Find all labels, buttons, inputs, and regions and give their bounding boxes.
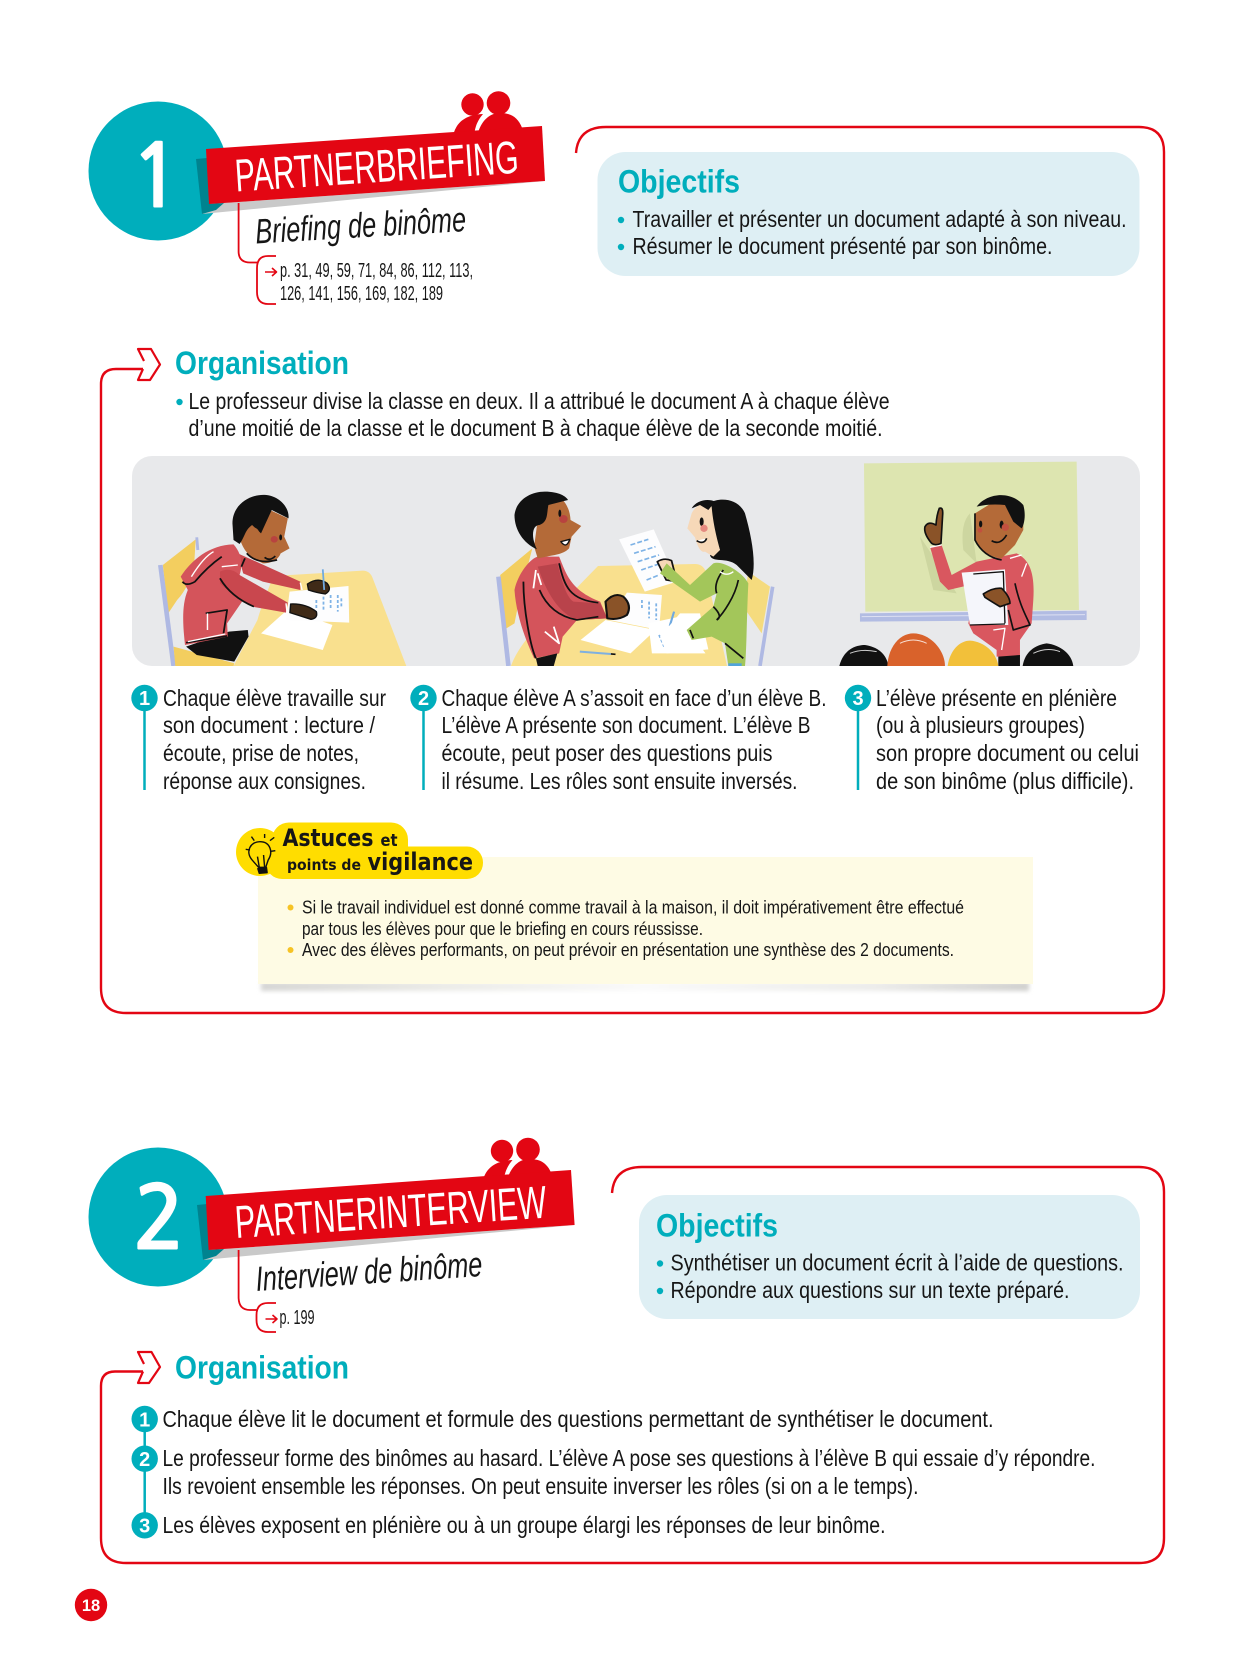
step 3	[845, 685, 1139, 794]
icon: two people	[452, 91, 524, 140]
step 1: écoute, prise de notes,	[163, 740, 359, 766]
panel: objectifs 2: Objectifs	[656, 1208, 778, 1244]
page references	[265, 260, 473, 305]
section 1: partnerbriefing	[88, 91, 1164, 1013]
icon: light bulb	[246, 834, 275, 873]
panel: astuces note: par tous les élèves pour que le briefing en cours réussisse.	[302, 918, 703, 939]
text: organisation intro	[176, 388, 890, 441]
panel: astuces note	[258, 857, 1033, 991]
icon: two people	[482, 1138, 554, 1186]
page reference: p. 199	[280, 1307, 314, 1329]
arrow: organisation chevron	[138, 1352, 160, 1383]
panel: classroom illustrations	[132, 456, 1140, 666]
heading: organisation: Organisation	[175, 1350, 349, 1386]
banner: Partnerbriefing	[196, 126, 545, 214]
page reference	[266, 1307, 314, 1329]
panel: objectifs 2	[639, 1195, 1140, 1319]
step 3: (ou à plusieurs groupes)	[876, 712, 1085, 738]
numbered steps: Chaque élève lit le document et formule des questions permettant de synthétiser le document.	[162, 1406, 994, 1432]
numbered steps: 2	[139, 1449, 150, 1471]
page number badge: 18	[82, 1597, 100, 1615]
numbered steps: Ils revoient ensemble les réponses. On peut ensuite inverser les rôles (si on a le temps).	[162, 1473, 918, 1499]
panel: objectifs 2: Répondre aux questions sur un texte préparé.	[670, 1277, 1070, 1303]
text: organisation intro: d’une moitié de la classe et le document B à chaque élève de la seconde moitié.	[188, 415, 882, 441]
step 2: écoute, peut poser des questions puis	[442, 740, 772, 766]
step 3: de son binôme (plus difficile).	[876, 768, 1134, 794]
banner: Partnerbriefing: PARTNERBRIEFING	[233, 131, 520, 201]
label: astuces et points de vigilance: points de	[287, 856, 361, 874]
label: astuces et points de vigilance: vigilance	[368, 848, 473, 876]
numbered steps: Les élèves exposent en plénière ou à un groupe élargi les réponses de leur binôme.	[162, 1512, 886, 1538]
panel: objectifs 1: Objectifs	[618, 164, 740, 200]
label: astuces et points de vigilance: Astuces	[282, 824, 374, 852]
number badge 2: 2	[132, 1176, 186, 1263]
heading: organisation: Organisation	[175, 345, 349, 381]
banner: Partnerinterview	[197, 1170, 575, 1260]
numbered steps	[132, 1406, 1096, 1539]
panel: objectifs 1: Travailler et présenter un document adapté à son niveau.	[632, 206, 1126, 232]
section 2: partnerinterview	[88, 1138, 1164, 1563]
panel: objectifs 1: Résumer le document présenté par son binôme.	[632, 233, 1052, 259]
number badge 2	[88, 1148, 228, 1286]
illustration: student working alone	[160, 495, 406, 666]
label: astuces et points de vigilance: et	[380, 831, 398, 851]
step 2: 2	[418, 688, 429, 710]
number badge 1	[88, 102, 228, 240]
step 3: 3	[852, 688, 864, 710]
banner: Partnerinterview: PARTNERINTERVIEW	[233, 1176, 548, 1248]
panel: objectifs 2: Synthétiser un document écrit à l’aide de questions.	[670, 1250, 1124, 1276]
step 2: il résume. Les rôles sont ensuite inversés.	[442, 768, 798, 794]
page number badge	[75, 1589, 107, 1621]
number badge 1: 1	[129, 134, 183, 221]
step 2: L’élève A présente son document. L’élève B	[442, 712, 810, 738]
illustration: student presenting to the class	[839, 462, 1087, 666]
arrow: organisation chevron	[138, 349, 160, 380]
page references connector	[239, 203, 276, 304]
step 3: L’élève présente en plénière	[876, 685, 1117, 711]
step 2	[410, 685, 826, 794]
numbered steps: 1	[139, 1410, 150, 1432]
step 1: son document : lecture /	[163, 712, 376, 738]
step 1	[131, 685, 386, 794]
text: organisation intro: Le professeur divise la classe en deux. Il a attribué le document A à chaque élève	[188, 388, 890, 414]
step 1: réponse aux consignes.	[163, 768, 366, 794]
subtitle: Interview de binôme: Interview de binôme	[254, 1245, 484, 1299]
illustration: desk shared by two students	[511, 564, 727, 666]
step 1: 1	[139, 688, 150, 710]
panel: astuces note: Avec des élèves performants, on peut prévoir en présentation une synthèse des 2 documents.	[302, 939, 954, 960]
page references connector	[239, 1250, 276, 1332]
step 3: son propre document ou celui	[876, 740, 1139, 766]
frame: section 1 red outline	[101, 127, 1164, 1013]
numbered steps: 3	[139, 1516, 150, 1538]
panel: objectifs 1	[598, 152, 1140, 276]
step 2: Chaque élève A s’assoit en face d’un élève B.	[442, 685, 826, 711]
step 1: Chaque élève travaille sur	[163, 685, 386, 711]
illustration: two students face to face	[498, 492, 705, 666]
label: astuces et points de vigilance	[236, 822, 483, 879]
page references: p. 31, 49, 59, 71, 84, 86, 112, 113,	[280, 260, 473, 282]
page references: 126, 141, 156, 169, 182, 189	[280, 283, 443, 305]
panel: astuces note: Si le travail individuel est donné comme travail à la maison, il doit impérativement être effectué	[302, 896, 964, 918]
subtitle: Briefing de binôme: Briefing de binôme	[254, 200, 467, 251]
frame: section 2 red outline	[101, 1167, 1164, 1563]
